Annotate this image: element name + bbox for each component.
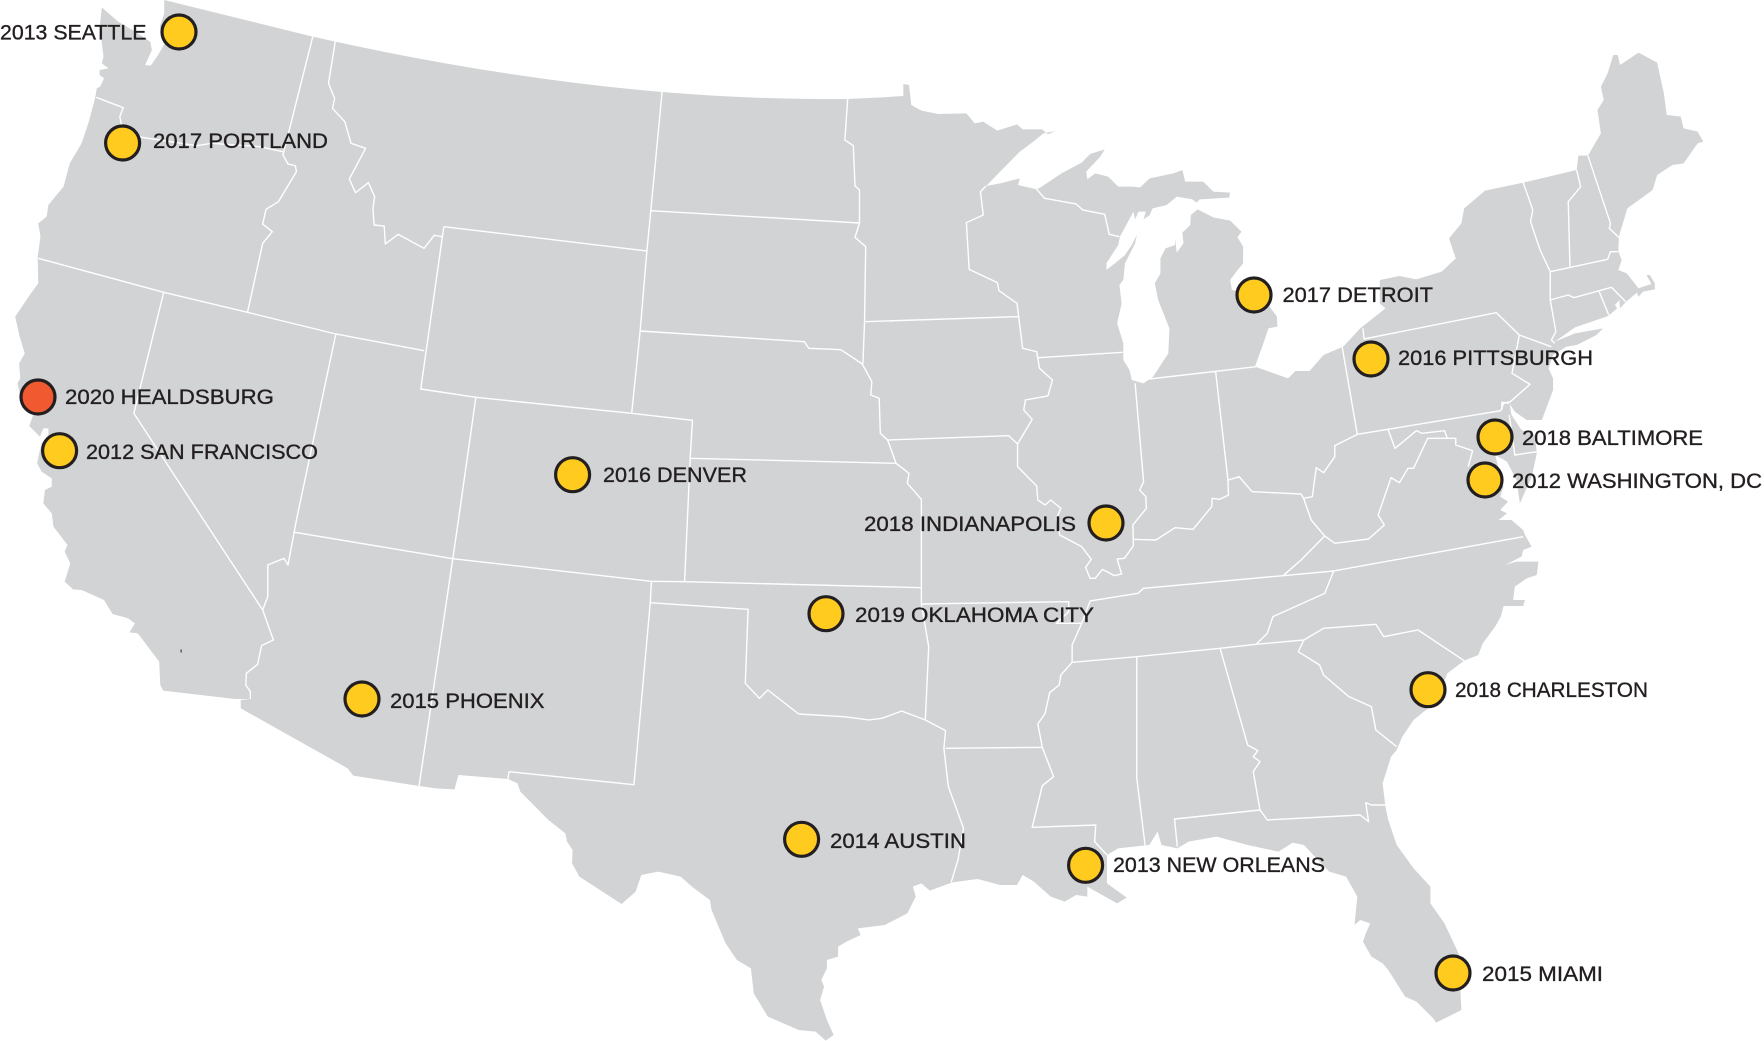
marker: 2012 Washington, DC: 2012 WASHINGTON, DC [1512, 470, 1762, 493]
marker: 2019 Oklahoma City: 2019 OKLAHOMA CITY [855, 604, 1094, 627]
marker: 2018 Baltimore: 2018 BALTIMORE [1522, 427, 1703, 450]
marker: 2012 San Francisco [43, 434, 318, 468]
small dark speck off California [181, 650, 182, 652]
marker: 2018 Indianapolis: 2018 INDIANAPOLIS [864, 513, 1076, 536]
marker: 2018 Indianapolis [864, 506, 1123, 540]
marker: 2016 Denver: 2016 DENVER [603, 464, 747, 487]
marker: 2017 Portland [106, 126, 328, 160]
marker: 2017 Detroit: 2017 DETROIT [1282, 284, 1433, 307]
marker: 2017 Detroit [1237, 278, 1433, 312]
marker: 2014 Austin [785, 822, 966, 856]
marker: 2012 Washington, DC [1468, 463, 1762, 497]
marker: 2015 Miami [1436, 956, 1603, 990]
marker: 2015 Miami: 2015 MIAMI [1482, 963, 1603, 986]
marker: 2016 Pittsburgh: 2016 PITTSBURGH [1398, 347, 1593, 370]
marker: 2012 San Francisco: 2012 SAN FRANCISCO [86, 441, 318, 464]
marker: 2018 Baltimore [1478, 420, 1703, 454]
marker: 2013 Seattle: 2013 SEATTLE [0, 22, 146, 44]
marker: 2016 Pittsburgh [1354, 342, 1593, 376]
marker: 2013 Seattle [0, 15, 196, 49]
marker: 2020 Healdsburg: 2020 HEALDSBURG [65, 386, 274, 409]
marker: 2018 Charleston: 2018 CHARLESTON [1455, 679, 1648, 702]
marker: 2020 Healdsburg [21, 380, 274, 414]
marker: 2015 Phoenix [345, 682, 544, 716]
marker: 2013 New Orleans: 2013 NEW ORLEANS [1113, 854, 1325, 877]
marker: 2018 Charleston [1411, 673, 1648, 707]
marker: 2019 Oklahoma City [809, 597, 1094, 631]
marker: 2013 New Orleans [1069, 848, 1325, 882]
marker: 2014 Austin: 2014 AUSTIN [830, 830, 966, 853]
marker: 2017 Portland: 2017 PORTLAND [153, 130, 328, 153]
state borders [38, 37, 1626, 882]
marker: 2016 Denver [556, 458, 747, 492]
marker: 2015 Phoenix: 2015 PHOENIX [390, 690, 544, 713]
